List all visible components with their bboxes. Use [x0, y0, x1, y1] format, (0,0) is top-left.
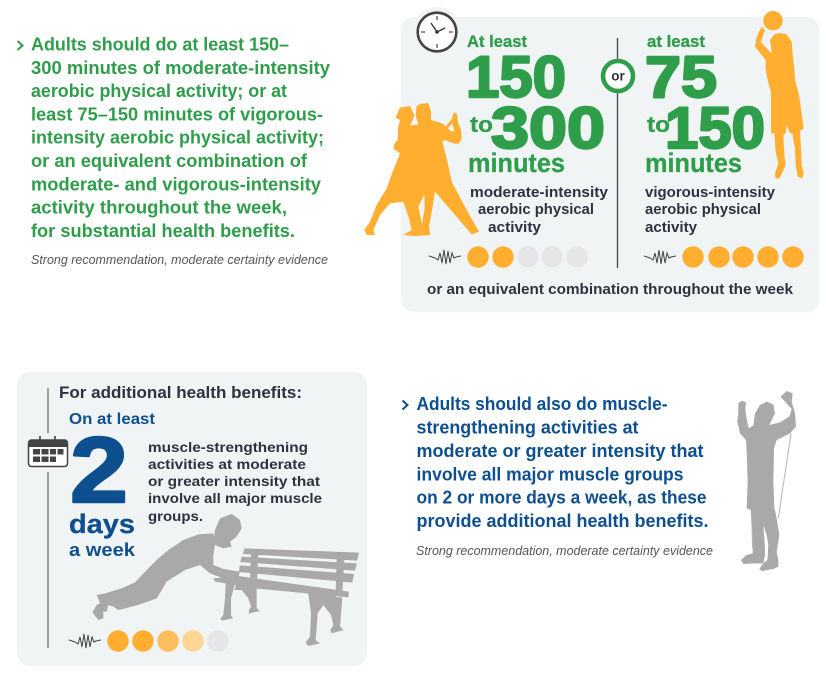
heading: additional health benefits: For additional health benefits:	[59, 384, 302, 402]
label: at least: at least	[647, 33, 706, 51]
intensity meter: muscle strengthening	[69, 630, 229, 652]
left column: moderate intensity	[429, 33, 608, 268]
label: to: to	[470, 112, 493, 137]
description: moderate intensity	[470, 185, 608, 236]
push-up figure silhouette	[92, 514, 242, 620]
recommendation text: aerobic: aerobic physical activity; or at	[31, 80, 287, 101]
recommendation text: muscle: Adults should also do muscle-	[416, 393, 668, 414]
panel: muscle strengthening	[17, 372, 367, 666]
number: 2: 2	[70, 418, 128, 522]
label: a week: a week	[69, 540, 136, 560]
evidence note: aerobic: Strong recommendation, moderate certainty evidence	[31, 253, 328, 267]
vertical timeline	[47, 388, 49, 648]
intensity meter: moderate	[429, 246, 588, 268]
recommendation text: aerobic	[31, 34, 331, 241]
resistance band figure silhouette	[737, 391, 796, 571]
recommendation text: aerobic: moderate- and vigorous-intensity	[31, 173, 322, 194]
number: 150: 150	[466, 45, 566, 110]
recommendation text: muscle: on 2 or more days a week, as these	[416, 487, 706, 508]
description: muscle strengthening: or greater intensity that	[148, 473, 320, 489]
number: 150: 150	[665, 96, 765, 161]
recommendation text: aerobic: least 75–150 minutes of vigorous-	[31, 103, 323, 124]
bench silhouette	[213, 548, 359, 646]
recommendation text: muscle: moderate or greater intensity that	[416, 440, 704, 461]
description: muscle strengthening: muscle-strengthening	[148, 439, 308, 455]
dancers silhouette	[364, 103, 479, 236]
description: moderate intensity: aerobic physical	[478, 202, 594, 218]
description: muscle strengthening: groups.	[148, 508, 203, 524]
recommendation text: muscle	[416, 393, 708, 531]
description: moderate intensity: activity	[488, 220, 541, 236]
recommendation text: aerobic: Adults should do at least 150–	[31, 34, 289, 54]
recommendation text: aerobic: for substantial health benefits.	[31, 220, 295, 241]
description: vigorous intensity	[645, 185, 775, 236]
label: to: to	[647, 112, 670, 137]
description: moderate intensity: moderate-intensity	[470, 185, 608, 201]
description: vigorous intensity: vigorous-intensity	[645, 185, 775, 201]
evidence note: muscle: Strong recommendation, moderate certainty evidence	[416, 544, 713, 558]
divider with or badge	[603, 38, 633, 268]
label: at least: At least	[467, 33, 528, 51]
label: days: days	[69, 509, 135, 539]
description: vigorous intensity: aerobic physical	[645, 202, 761, 218]
basketball player silhouette	[755, 11, 804, 179]
recommendation text: muscle: provide additional health benefits.	[416, 510, 708, 531]
text block: muscle recommendation	[402, 393, 713, 558]
panel background	[17, 372, 367, 666]
recommendation text: aerobic: or an equivalent combination of	[31, 150, 308, 171]
panel: aerobic activity	[364, 7, 820, 312]
footer text: equivalent combination: or an equivalent combination throughout the week	[427, 282, 794, 298]
label: minutes: minutes	[645, 148, 742, 178]
number: 300: 300	[491, 96, 605, 161]
text block: aerobic recommendation	[18, 34, 331, 267]
panel background	[401, 17, 820, 312]
icon: clock	[418, 13, 456, 51]
recommendation text: muscle: involve all major muscle groups	[416, 463, 684, 484]
description: muscle strengthening: involve all major muscle	[148, 490, 322, 506]
description: vigorous intensity: activity	[645, 220, 697, 236]
chevron: muscle	[402, 400, 408, 410]
description: muscle strengthening: activities at moderate	[148, 456, 306, 472]
label: on at least: On at least	[69, 411, 155, 428]
clock halo	[412, 7, 462, 57]
right column: vigorous intensity	[644, 33, 804, 268]
label: minutes: minutes	[468, 148, 565, 178]
divider with or badge: or	[611, 68, 625, 84]
recommendation text: aerobic: intensity aerobic physical activity;	[31, 127, 324, 148]
recommendation text: muscle: strengthening activities at	[416, 416, 638, 438]
icon: calendar	[28, 436, 68, 466]
recommendation text: aerobic: 300 minutes of moderate-intensity	[31, 57, 331, 78]
description: muscle strengthening	[148, 439, 322, 524]
chevron: aerobic	[18, 41, 22, 50]
intensity meter: vigorous	[644, 246, 804, 268]
recommendation text: aerobic: activity throughout the week,	[31, 197, 287, 218]
number: 75: 75	[645, 45, 717, 110]
